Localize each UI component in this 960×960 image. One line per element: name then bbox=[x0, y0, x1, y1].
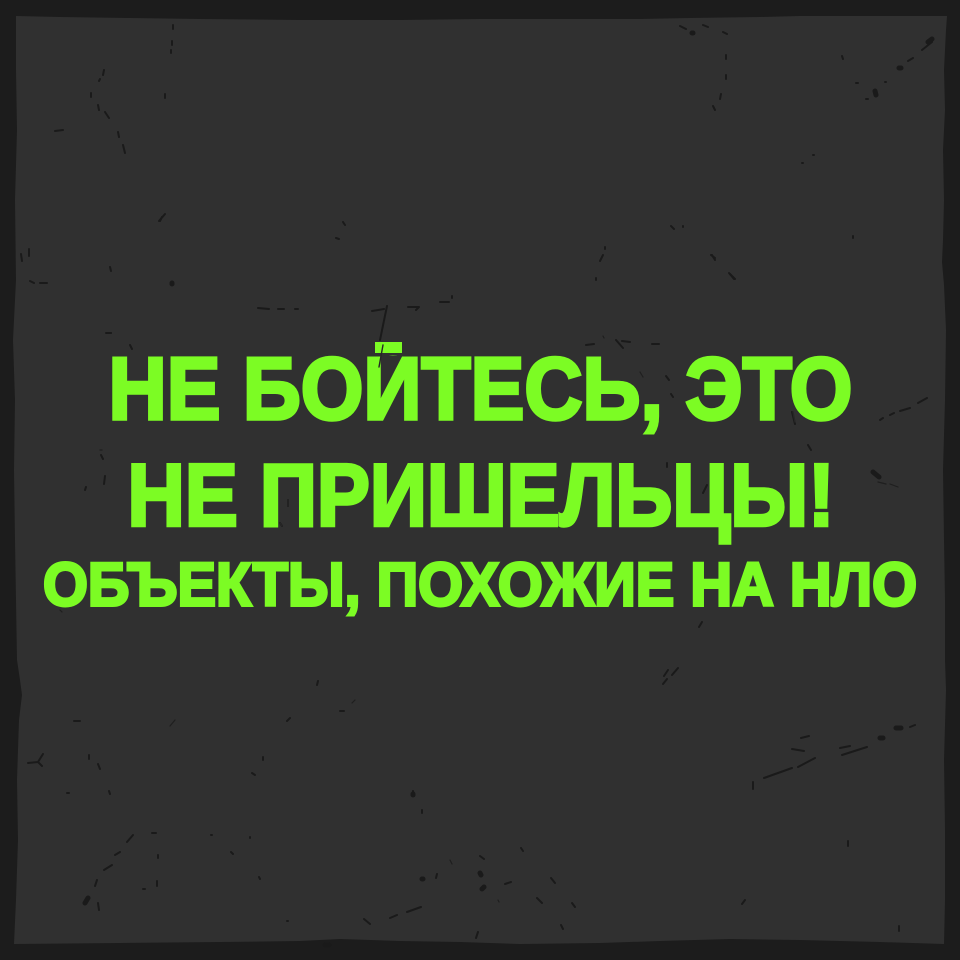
subtitle: ОБЪЕКТЫ, ПОХОЖИЕ НА НЛО bbox=[43, 550, 917, 618]
breve bar of the letter Й bbox=[375, 342, 402, 353]
scratches over the letters bbox=[280, 345, 795, 526]
headline line 1: НЕ БОЙТЕСЬ, ЭТО bbox=[108, 339, 852, 438]
headline line 2: НЕ ПРИШЕЛЬЦЫ! bbox=[128, 446, 834, 544]
